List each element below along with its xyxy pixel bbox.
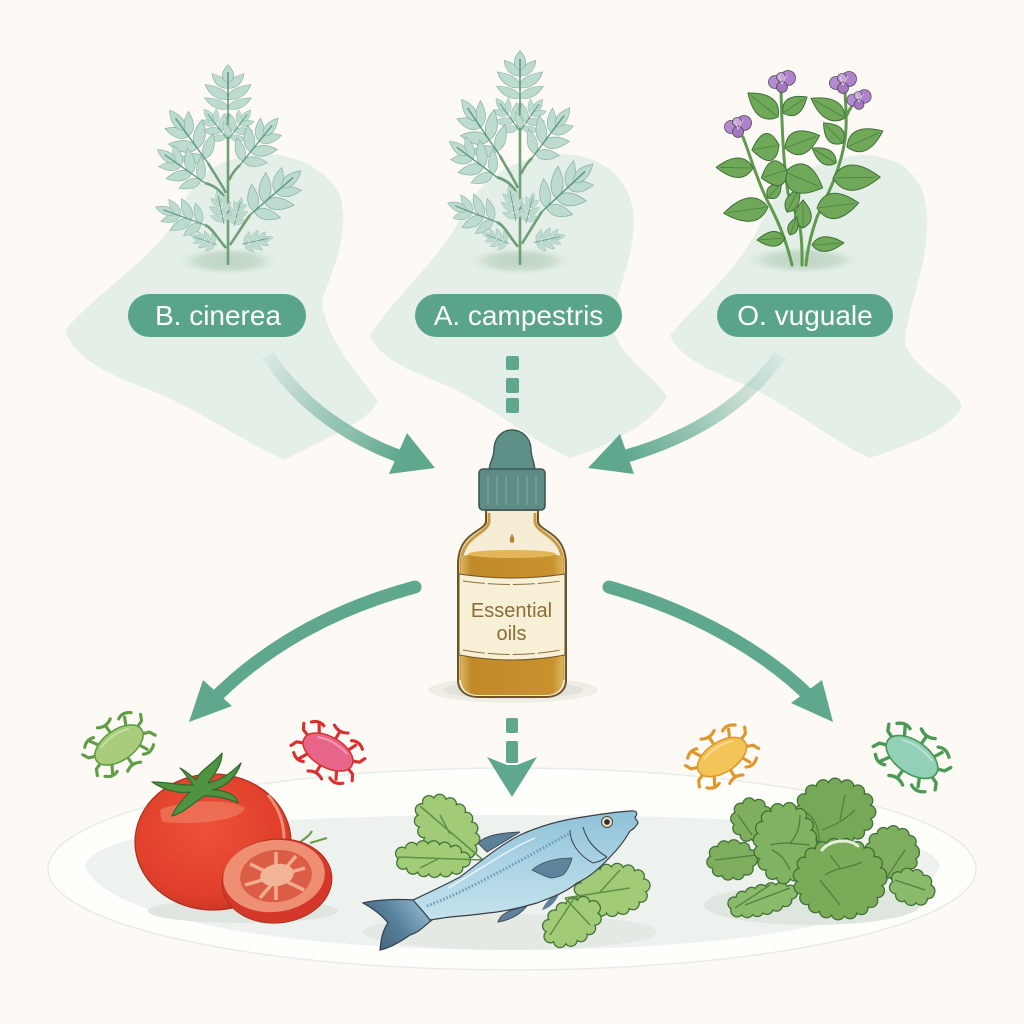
- food: leafy greens: [704, 785, 932, 925]
- label pill: O. vuguale: [717, 294, 893, 337]
- leaf: lower: [541, 895, 603, 949]
- plant: B. cinerea: [145, 65, 318, 275]
- food: tomato: [135, 753, 338, 929]
- bottle shadow: [428, 677, 598, 703]
- leaf: right upper: [871, 832, 913, 874]
- leaves: [398, 790, 646, 949]
- region blob: B. cinerea: [65, 154, 378, 460]
- microbe: teal: [865, 712, 959, 802]
- arrow: B. cinerea to bottle: [268, 355, 435, 474]
- lateral line: [427, 833, 570, 906]
- plant: O. vuguale: [716, 70, 887, 274]
- microbe: green: [75, 703, 163, 787]
- label pill: O. vuguale: O. vuguale: [737, 300, 873, 331]
- gill: [570, 827, 607, 863]
- glass body: [458, 510, 566, 697]
- label text: Essential: [471, 600, 552, 622]
- whole tomato: [135, 774, 291, 910]
- leaf: lower right: [578, 866, 646, 914]
- label pill: A. campestris: [415, 294, 622, 337]
- food: fish on leaves: [363, 790, 657, 950]
- leaf: bottom left: [731, 884, 793, 916]
- calyx: [152, 753, 241, 816]
- label pill: B. cinerea: [128, 294, 306, 337]
- arrow: O. vuguale to bottle: [588, 355, 780, 474]
- pectoral fin: [532, 858, 572, 878]
- arrow: bottle to tomato: [189, 587, 415, 722]
- bottle: essential oils: [428, 430, 598, 703]
- label text: oils: [496, 623, 527, 645]
- oil drop: [510, 534, 514, 543]
- fish body: [413, 811, 638, 920]
- eye: [602, 816, 612, 828]
- fish back sheen: [448, 838, 535, 888]
- arrow: bottle to greens: [609, 587, 833, 722]
- region blob: A. campestris: [370, 154, 667, 458]
- paper label: [459, 574, 565, 660]
- dorsal fin: [478, 832, 520, 852]
- dropper collar: [479, 469, 545, 510]
- leaf: upper left: [737, 804, 767, 836]
- leaf: left: [713, 846, 751, 874]
- leaf: upper: [410, 790, 484, 866]
- cut tomato half: [218, 831, 336, 929]
- oil fill: [461, 552, 563, 695]
- microbe: pink: [284, 711, 372, 793]
- glass amber rim: [461, 513, 489, 680]
- plate: [48, 768, 976, 970]
- arrow: bottle to fish: [487, 718, 537, 797]
- fish tail: [363, 899, 432, 950]
- label text: [471, 600, 552, 645]
- head: left: [760, 809, 810, 877]
- head: top: [800, 785, 869, 845]
- leaf: left: [399, 845, 465, 873]
- head: front: [800, 841, 880, 913]
- label pill: A. campestris: A. campestris: [434, 300, 603, 331]
- outer leaves: [713, 804, 932, 916]
- label pill: B. cinerea: B. cinerea: [155, 300, 281, 331]
- arrow: A. campestris to bottle (dashed): [506, 356, 519, 413]
- region blob: O. vuguale: [670, 155, 962, 458]
- leaf: right lower: [892, 870, 932, 904]
- plant: A. campestris: [437, 51, 610, 275]
- panel: plant sources: [65, 51, 962, 460]
- microbe: yellow: [678, 716, 766, 798]
- dropper bulb: [489, 430, 535, 472]
- lower fins: [498, 906, 527, 922]
